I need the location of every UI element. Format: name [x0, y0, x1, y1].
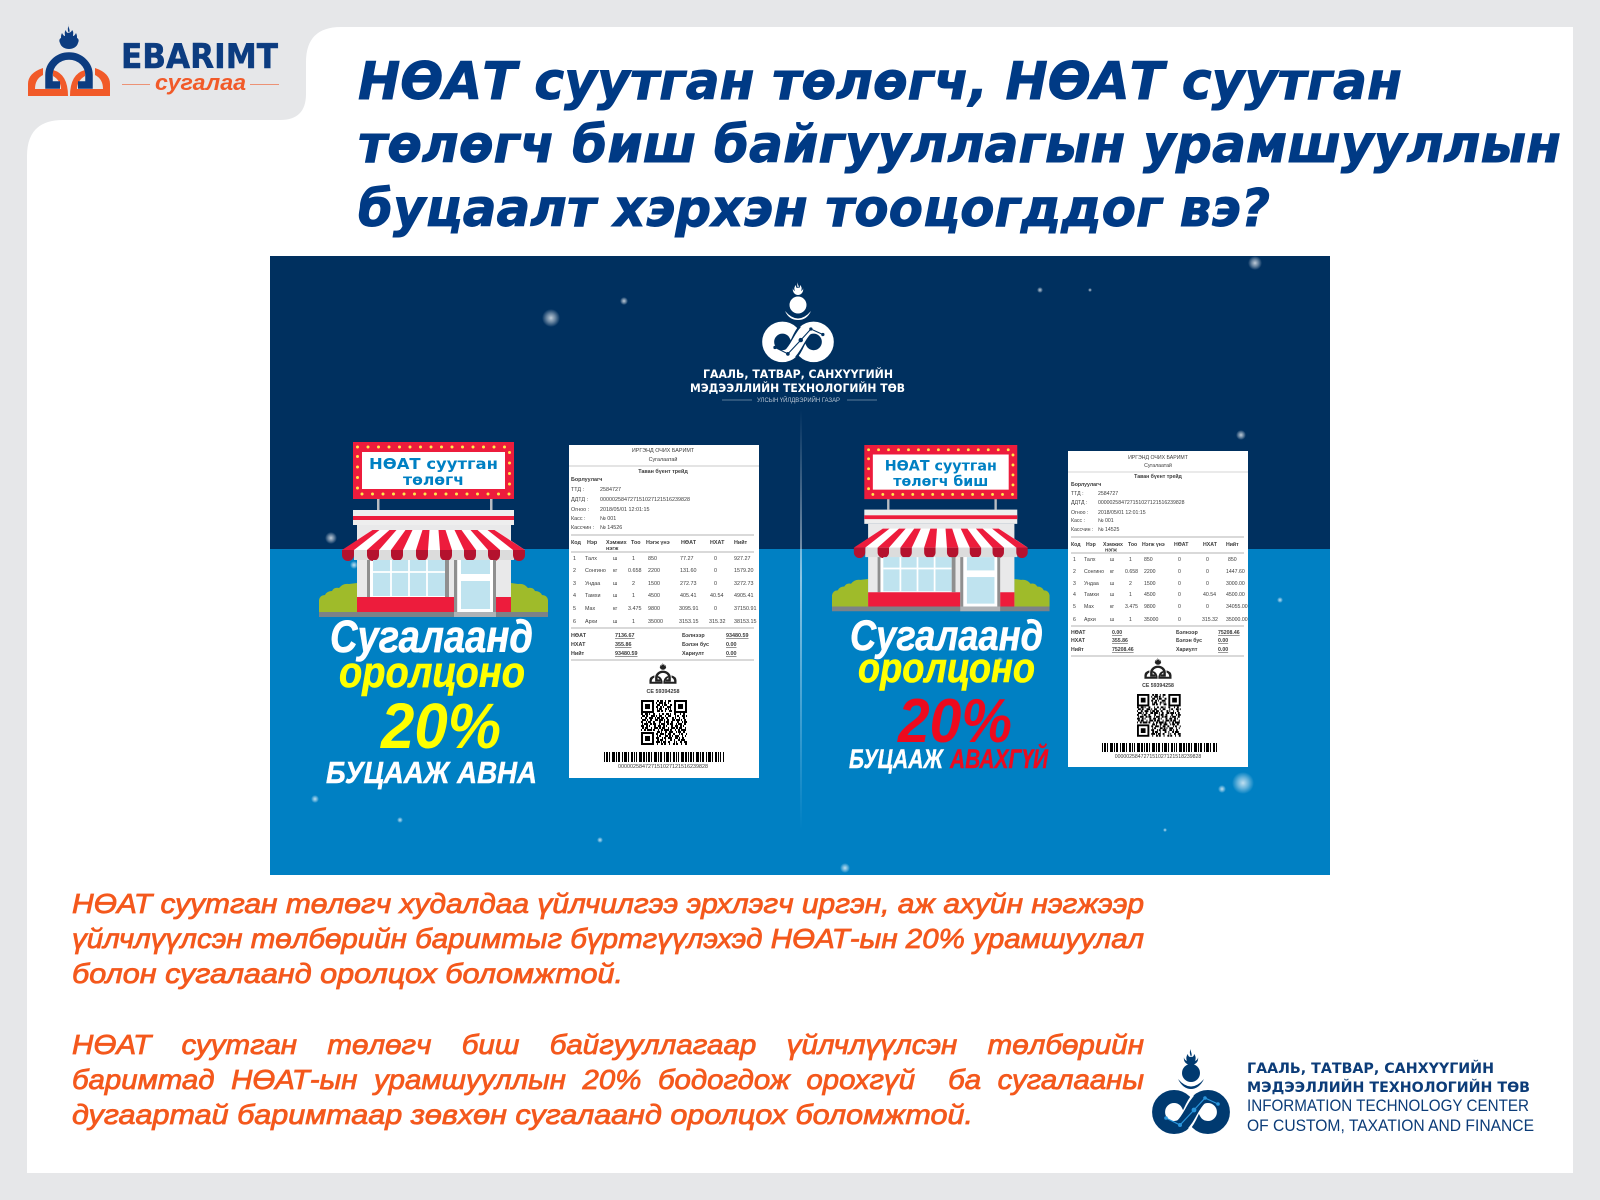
- panel: right receipt: Нийт: [1071, 646, 1084, 653]
- panel: right receipt: 75208.46: [1112, 647, 1134, 653]
- panel: left receipt: 1579.20: [734, 568, 754, 574]
- panel: right receipt: 9800: [1144, 604, 1156, 610]
- panel: right receipt: Архи: [1084, 617, 1096, 623]
- panel: right receipt: 1447.60: [1226, 569, 1245, 575]
- text block: explanation paragraph 1: НӨАТ суутган төлөгч худалдаа үйлчилгээ эрхлэгч иргэн, аж ахуйн нэгжээр: [72, 888, 1144, 919]
- icon: barcode: [604, 752, 724, 762]
- panel: left receipt: Ундаа: [585, 581, 600, 587]
- panel: left receipt: 2584727: [600, 487, 621, 493]
- panel: left receipt: НӨАТ: [681, 540, 697, 546]
- panel: left receipt: кг: [613, 568, 617, 574]
- logo: Ebarimt сугалаа: [28, 24, 279, 96]
- panel: right receipt: 1: [1129, 592, 1132, 598]
- title: төлөгч биш байгууллагын урамшууллын: [358, 115, 1561, 175]
- panel: left receipt: 850: [648, 556, 657, 562]
- icon: left shop: НӨАТ суутган: [369, 455, 498, 473]
- panel: left receipt: ш: [613, 593, 617, 599]
- panel: left receipt: 0: [714, 556, 717, 562]
- panel: left receipt: ш: [613, 556, 617, 562]
- panel: left receipt: 9800: [648, 606, 660, 612]
- panel: left receipt: 2: [573, 568, 576, 574]
- panel: left receipt: 131.60: [680, 568, 696, 574]
- panel: left receipt: НХАТ: [571, 642, 586, 648]
- panel: left receipt: ТТД :: [571, 487, 584, 493]
- panel: left receipt: 6: [573, 619, 576, 625]
- panel: left receipt: Хариулт: [682, 651, 705, 657]
- logo: Information Technology Center: [1159, 1049, 1534, 1135]
- panel: right receipt: Сугалаатай: [1144, 462, 1172, 469]
- panel: left receipt: 2: [632, 581, 635, 587]
- panel: right receipt: 2584727: [1098, 491, 1118, 497]
- panel: left receipt: Огноо :: [571, 507, 589, 513]
- poster dark upper background: [270, 256, 1330, 549]
- panel: right receipt: Кассчин :: [1071, 527, 1093, 533]
- panel: right receipt: ш: [1110, 557, 1114, 563]
- panel: left receipt: Тоо: [631, 540, 641, 546]
- org name English: [1247, 1097, 1534, 1135]
- left slogan: Сугалаанд: [330, 611, 533, 662]
- panel: left receipt: 927.27: [734, 556, 750, 562]
- panel: right receipt: НХАТ: [1071, 638, 1086, 644]
- org subtitle: УЛСЫН ҮЙЛДВЭРИЙН ГАЗАР: [757, 396, 840, 404]
- panel: right receipt: Талх: [1084, 557, 1096, 563]
- panel: left receipt: Бэлэн бус: [682, 641, 709, 648]
- icon: receipt logo: [649, 662, 676, 684]
- panel: left receipt: Борлуулагч: [571, 477, 602, 483]
- panel: right receipt: 5: [1073, 604, 1076, 610]
- panel: left receipt: Хэмжих: [606, 540, 627, 546]
- panel: right receipt: Нэгж үнэ: [1142, 542, 1165, 548]
- right slogan: АВАХГҮЙ: [949, 742, 1048, 774]
- icon: QR code: [641, 700, 687, 745]
- panel: central poster image: [270, 256, 1330, 875]
- icon: right shop: төлөгч биш: [893, 474, 988, 490]
- panel: right receipt: 0: [1178, 617, 1181, 623]
- panel: right receipt: 1: [1129, 617, 1132, 623]
- panel: right receipt: Касс :: [1071, 518, 1085, 524]
- panel: right receipt: кг: [1110, 604, 1114, 610]
- panel: left receipt: 2018/05/01 12:01:15: [600, 507, 649, 513]
- panel: right receipt: 35000.00: [1226, 617, 1248, 623]
- panel: left receipt: 405.41: [680, 593, 696, 599]
- panel: right receipt: 1: [1073, 557, 1076, 563]
- panel: left receipt: 0.658: [628, 568, 642, 574]
- panel: left receipt: 38153.15: [734, 619, 756, 625]
- panel: left receipt: Сонгино: [585, 568, 606, 574]
- panel: left receipt: 272.73: [680, 581, 696, 587]
- panel: left receipt: Архи: [585, 619, 597, 625]
- left slogan: [326, 611, 537, 790]
- panel: left receipt: 2200: [648, 568, 660, 574]
- icon: left shop: төлөгч: [403, 471, 464, 489]
- panel: left receipt: 5: [573, 606, 576, 612]
- panel: right receipt: 0: [1206, 581, 1209, 587]
- panel: right receipt: Бэлэн бус: [1176, 637, 1202, 644]
- text block: explanation paragraph 2: [72, 1029, 1144, 1130]
- panel: right receipt: 0.00: [1218, 638, 1228, 644]
- panel: right receipt: 75208.46: [1218, 630, 1240, 636]
- left slogan: оролцоно: [339, 648, 525, 697]
- panel: left receipt: 93480.59: [615, 651, 637, 657]
- panel: left receipt: Нэгж үнэ: [646, 540, 670, 546]
- panel: left receipt: 3: [573, 581, 576, 587]
- title: [358, 52, 1561, 239]
- title: буцаалт хэрхэн тооцогддог вэ?: [358, 179, 1270, 239]
- panel: left receipt: Таван бүент трейд: [638, 468, 688, 475]
- panel: right receipt: 6: [1073, 617, 1076, 623]
- panel: left receipt: № 001: [600, 516, 616, 522]
- panel: left receipt: ДДТД :: [571, 497, 588, 503]
- panel: left receipt: № 14526: [600, 525, 622, 531]
- panel: right receipt: Тамхи: [1084, 592, 1099, 598]
- panel: left receipt: ш: [613, 619, 617, 625]
- panel: right receipt: Нийт: [1226, 541, 1239, 548]
- panel: left receipt: 1: [573, 556, 576, 562]
- panel: right receipt: 2: [1073, 569, 1076, 575]
- right slogan: [849, 612, 1048, 774]
- panel: left receipt: Сугалаатай: [649, 456, 677, 463]
- panel: left receipt: Тамхи: [585, 593, 600, 599]
- left slogan: БУЦААЖ АВНА: [326, 755, 537, 790]
- panel: right receipt: ш: [1110, 581, 1114, 587]
- panel: right receipt: 315.32: [1202, 617, 1218, 623]
- panel: right receipt: CE 59394258: [1142, 683, 1174, 689]
- panel: right receipt: 4500: [1144, 592, 1156, 598]
- panel: right receipt: 0.00: [1218, 647, 1228, 653]
- panel: right receipt: № 001: [1098, 518, 1114, 524]
- panel: right receipt: НХАТ: [1203, 542, 1218, 548]
- panel: left receipt: 3272.73: [734, 581, 754, 587]
- panel: right receipt: 2200: [1144, 569, 1156, 575]
- panel: right receipt: 0: [1178, 604, 1181, 610]
- panel: right receipt: 0: [1178, 569, 1181, 575]
- panel: right receipt: ТТД :: [1071, 491, 1084, 497]
- text block: explanation paragraph 1: [72, 888, 1144, 989]
- panel: left receipt: 0.00: [726, 642, 736, 648]
- panel: left receipt: Мах: [585, 606, 596, 612]
- panel: left receipt: Код: [571, 540, 582, 546]
- panel: right receipt: Огноо :: [1071, 510, 1088, 516]
- panel: left receipt: 1: [632, 593, 635, 599]
- panel: right receipt: 000002584727151027121518239828: [1115, 754, 1201, 760]
- panel: left receipt: 0.00: [726, 651, 736, 657]
- panel: right receipt: НӨАТ: [1071, 630, 1086, 636]
- org name line 2: МЭДЭЭЛЛИЙН ТЕХНОЛОГИЙН ТӨВ: [690, 380, 905, 395]
- panel: left receipt: 40.54: [710, 593, 724, 599]
- panel: right receipt: 1: [1129, 557, 1132, 563]
- panel: right receipt: Таван бүент трейд: [1134, 473, 1183, 480]
- org name Mongolian: МЭДЭЭЛЛИЙН ТЕХНОЛОГИЙН ТӨВ: [1247, 1079, 1530, 1096]
- panel: right receipt: 000002584727151027121516239828: [1098, 500, 1185, 506]
- panel: right receipt: нэгж: [1105, 548, 1117, 554]
- icon: barcode: [1102, 743, 1217, 752]
- panel: left receipt: ш: [613, 581, 617, 587]
- panel: left receipt: 1: [632, 619, 635, 625]
- panel: right receipt: ш: [1110, 617, 1114, 623]
- panel: right receipt: Код: [1071, 542, 1081, 548]
- panel: right receipt: ш: [1110, 592, 1114, 598]
- icon: receipt logo: [1144, 657, 1172, 679]
- icon: blue soyombo knot: [1159, 1049, 1223, 1128]
- panel: right receipt: Сонгино: [1084, 569, 1104, 575]
- panel: left receipt: 355.86: [615, 642, 632, 648]
- icon: left shop: [319, 442, 548, 617]
- panel: left receipt: [569, 445, 759, 778]
- panel: right receipt: 2: [1129, 581, 1132, 587]
- org name line 1: ГААЛЬ, ТАТВАР, САНХҮҮГИЙН: [703, 366, 893, 381]
- panel: left receipt: Нийт: [734, 539, 748, 546]
- panel: right receipt: 3: [1073, 581, 1076, 587]
- org name Mongolian: [1247, 1060, 1530, 1096]
- panel: right receipt: ИРГЭНД ОЧИХ БАРИМТ: [1128, 455, 1189, 461]
- panel: right receipt: Ундаа: [1084, 581, 1099, 587]
- panel: left receipt: 3153.15: [679, 619, 698, 625]
- text block: explanation paragraph 1: үйлчлүүлсэн төлбөрийн баримтыг бүртгүүлэхэд НӨАТ-ын 20% урамшуулал: [72, 923, 1144, 954]
- icon: QR code: [1137, 694, 1181, 737]
- panel: right receipt: 2018/05/01 12:01:15: [1098, 510, 1146, 516]
- wordmark сугалаа: сугалаа: [155, 70, 246, 95]
- right slogan: оролцоно: [858, 644, 1035, 691]
- panel: left receipt: 315.32: [709, 619, 726, 625]
- panel: right receipt: 35000: [1144, 617, 1159, 623]
- panel: right receipt: Мах: [1084, 604, 1094, 610]
- icon: right shop: [832, 445, 1050, 611]
- panel: left receipt: 000002584727151027121516239828: [618, 764, 708, 770]
- panel: left receipt: кг: [613, 606, 617, 612]
- right slogan: Сугалаанд: [850, 612, 1043, 660]
- panel: left receipt: Кассчин :: [571, 525, 594, 531]
- panel: right receipt: Борлуулагч: [1071, 482, 1101, 488]
- panel: left receipt: ИРГЭНД ОЧИХ БАРИМТ: [632, 448, 695, 454]
- panel: right receipt: 4500.00: [1226, 592, 1245, 598]
- wordmark EBARIMT: EBARIMT: [121, 37, 279, 77]
- text block: explanation paragraph 2: дугаартай баримтаар зөвхөн сугалаанд оролцох боломжтой.: [72, 1099, 973, 1130]
- panel: left receipt: 0: [714, 581, 717, 587]
- panel: right receipt: 40.54: [1203, 592, 1216, 598]
- panel: right receipt: 3.475: [1125, 604, 1138, 610]
- panel: right receipt: кг: [1110, 569, 1114, 575]
- text block: explanation paragraph 1: болон сугалаанд оролцох боломжтой.: [72, 958, 623, 989]
- text block: explanation paragraph 2: баримтад НӨАТ-ын урамшууллын 20% бодогдож орохгүй ба сугалааны: [72, 1064, 1144, 1095]
- panel: left receipt: 3.475: [628, 606, 642, 612]
- panel: right receipt: 4: [1073, 592, 1076, 598]
- panel: right receipt: 0: [1178, 592, 1181, 598]
- panel: left receipt: 4905.41: [734, 593, 754, 599]
- panel: left receipt: 1500: [648, 581, 660, 587]
- panel: right receipt: 1500: [1144, 581, 1156, 587]
- panel: right receipt: 0: [1178, 581, 1181, 587]
- panel: right receipt: Нэр: [1086, 542, 1096, 548]
- panel: left receipt: CE 59394258: [647, 689, 679, 695]
- panel: left receipt: Бэлнээр: [682, 633, 705, 639]
- right slogan: БУЦААЖ: [849, 744, 945, 774]
- panel: left receipt: 4: [573, 593, 576, 599]
- divider lines beside сугалаа: [122, 84, 279, 86]
- text block: explanation paragraph 2: НӨАТ суутган төлөгч биш байгууллагаар үйлчлүүлсэн төлбөрийн: [72, 1029, 1144, 1060]
- panel: right receipt: 0.00: [1112, 630, 1122, 636]
- panel: left receipt: 93480.59: [726, 633, 748, 639]
- org name Mongolian: ГААЛЬ, ТАТВАР, САНХҮҮГИЙН: [1247, 1060, 1494, 1077]
- icon: right shop: НӨАТ суутган: [885, 459, 997, 475]
- panel: right receipt: 355.86: [1112, 638, 1128, 644]
- left slogan: 20%: [380, 690, 501, 762]
- panel: left receipt: 0: [714, 568, 717, 574]
- panel: right receipt: 0.658: [1125, 569, 1138, 575]
- panel: right receipt: 850: [1144, 557, 1153, 563]
- panel: left receipt: 0: [714, 606, 717, 612]
- panel: right receipt: 3000.00: [1226, 581, 1245, 587]
- snow particles: [311, 256, 1283, 873]
- panel: right receipt: 0: [1206, 569, 1209, 575]
- poster logo: customs IT centre: [690, 282, 905, 404]
- panel: left receipt: 77.27: [680, 556, 694, 562]
- panel: left receipt: 3095.91: [679, 606, 698, 612]
- panel: right receipt: ДДТД :: [1071, 500, 1087, 506]
- panel: left receipt: 7136.67: [615, 633, 634, 639]
- panel: right receipt: НӨАТ: [1174, 542, 1189, 548]
- panel: left receipt: 1: [632, 556, 635, 562]
- panel: left receipt: 37150.91: [734, 606, 756, 612]
- panel: left receipt: Нийт: [571, 650, 585, 657]
- panel: left receipt: нэгж: [606, 546, 618, 552]
- org name English: OF CUSTOM, TAXATION AND FINANCE: [1247, 1117, 1534, 1135]
- panel: right receipt: Бэлнээр: [1176, 630, 1198, 636]
- title: НӨАТ суутган төлөгч, НӨАТ суутган: [358, 52, 1402, 112]
- panel: left receipt: 000002584727151027121516239828: [600, 497, 690, 503]
- panel: right receipt: № 14525: [1098, 527, 1120, 533]
- panel: right receipt: 850: [1228, 557, 1237, 563]
- subtitle rules: [722, 399, 877, 401]
- panel: right receipt: Хэмжих: [1103, 542, 1123, 548]
- right slogan: 20%: [897, 687, 1012, 756]
- panel: right receipt: 0: [1178, 557, 1181, 563]
- panel: left receipt: 4500: [648, 593, 660, 599]
- centre divider glow: [800, 410, 802, 830]
- panel: right receipt: Хариулт: [1176, 647, 1198, 653]
- panel: right receipt: 0: [1206, 557, 1209, 563]
- panel: left receipt: НӨАТ: [571, 633, 587, 639]
- icon: white soyombo knot: [768, 282, 828, 356]
- icon: Ebarimt flame and arches: [28, 24, 110, 96]
- panel: left receipt: Касс :: [571, 516, 586, 522]
- panel: left receipt: 35000: [648, 619, 663, 625]
- panel: left receipt: НХАТ: [710, 540, 725, 546]
- panel: left receipt: Нэр: [587, 540, 598, 546]
- org name English: INFORMATION TECHNOLOGY CENTER: [1247, 1097, 1529, 1115]
- poster blue lower background: [270, 549, 1330, 875]
- panel: right receipt: 34055.00: [1226, 604, 1248, 610]
- panel: left receipt: Талх: [585, 556, 597, 562]
- panel: right receipt: 0: [1206, 604, 1209, 610]
- panel: right receipt: [1068, 451, 1248, 767]
- panel: right receipt: Тоо: [1128, 542, 1137, 548]
